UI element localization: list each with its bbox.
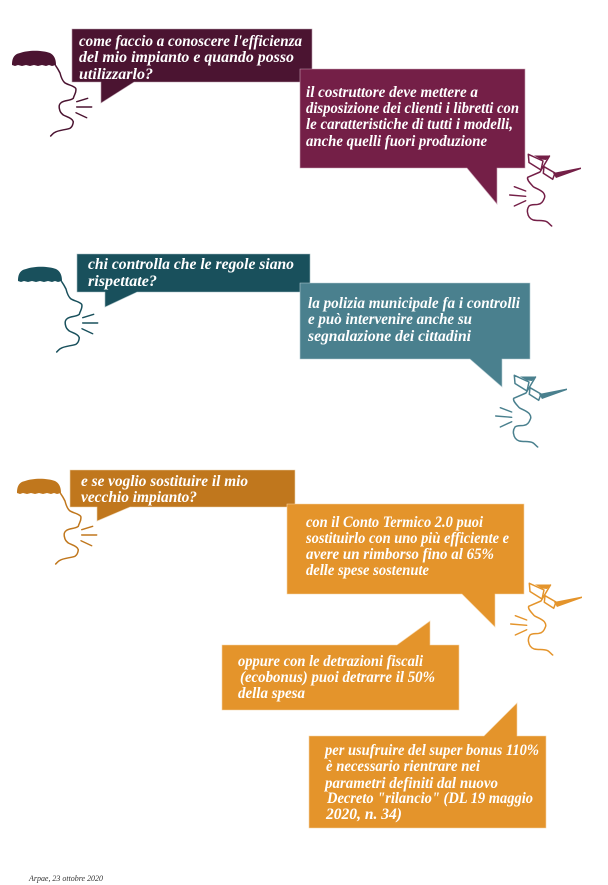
person answering: orange with glasses	[511, 583, 582, 655]
person asking: teal	[18, 267, 98, 352]
answer bubble: super bonus	[309, 703, 546, 828]
answer bubble: costruttore: le caratteristiche di tutti i modelli,	[306, 116, 513, 133]
question bubble: efficienza: utilizzarlo?	[79, 66, 153, 83]
answer bubble: ecobonus: della spesa	[238, 685, 305, 702]
question bubble: efficienza: come faccio a conoscere l'efficienza	[79, 33, 302, 50]
answer bubble: Conto Termico: sostituirlo con uno più efficiente e	[305, 530, 509, 547]
question bubble: sostituire impianto: e se voglio sostituire il mio	[81, 473, 248, 490]
answer bubble: super bonus: parametri definiti dal nuovo	[323, 775, 498, 792]
answer bubble: polizia municipale: e può intervenire anche su	[308, 311, 472, 328]
answer bubble: Conto Termico: con il Conto Termico 2.0 puoi	[306, 514, 484, 531]
answer bubble: super bonus: 2020, n. 34)	[325, 806, 402, 823]
answer bubble: super bonus: è necessario rientrare nei	[326, 758, 481, 775]
question bubble: sostituire impianto	[70, 470, 295, 521]
question bubble: controlli: rispettate?	[88, 273, 157, 290]
answer bubble: costruttore: il costruttore deve mettere a	[306, 84, 478, 101]
answer bubble: Conto Termico: avere un rimborso fino al 65%	[306, 546, 494, 563]
question bubble: efficienza: del mio impianto e quando posso	[79, 49, 294, 66]
person answering: blue-teal with glasses	[496, 375, 567, 447]
answer bubble: Conto Termico: delle spese sostenute	[306, 562, 429, 579]
answer bubble: polizia municipale: segnalazione dei cittadini	[307, 328, 472, 345]
answer bubble: ecobonus: oppure con le detrazioni fiscali	[238, 653, 424, 670]
person asking: ochre	[17, 479, 97, 564]
answer bubble: ecobonus: (ecobonus) puoi detrarre il 50%	[240, 669, 435, 686]
question bubble: controlli	[77, 254, 310, 307]
person asking: plum	[12, 51, 92, 136]
answer bubble: polizia municipale: la polizia municipale fa i controlli	[308, 295, 521, 312]
question bubble: efficienza	[72, 29, 312, 103]
question bubble: sostituire impianto: vecchio impianto?	[81, 489, 197, 506]
answer bubble: costruttore	[300, 69, 525, 204]
footer credit: Arpae, 23 ottobre 2020	[28, 873, 104, 883]
question bubble: controlli: chi controlla che le regole siano	[88, 256, 294, 273]
answer bubble: polizia municipale	[300, 283, 530, 387]
answer bubble: costruttore: anche quelli fuori produzione	[306, 133, 487, 150]
answer bubble: super bonus: per usufruire del super bonus 110%	[323, 742, 539, 759]
person answering: purple with glasses	[510, 154, 581, 226]
answer bubble: ecobonus	[222, 621, 459, 710]
answer bubble: costruttore: disposizione dei clienti i libretti con	[306, 100, 519, 117]
answer bubble: super bonus: Decreto "rilancio" (DL 19 maggio	[326, 790, 533, 807]
answer bubble: Conto Termico	[287, 504, 524, 627]
